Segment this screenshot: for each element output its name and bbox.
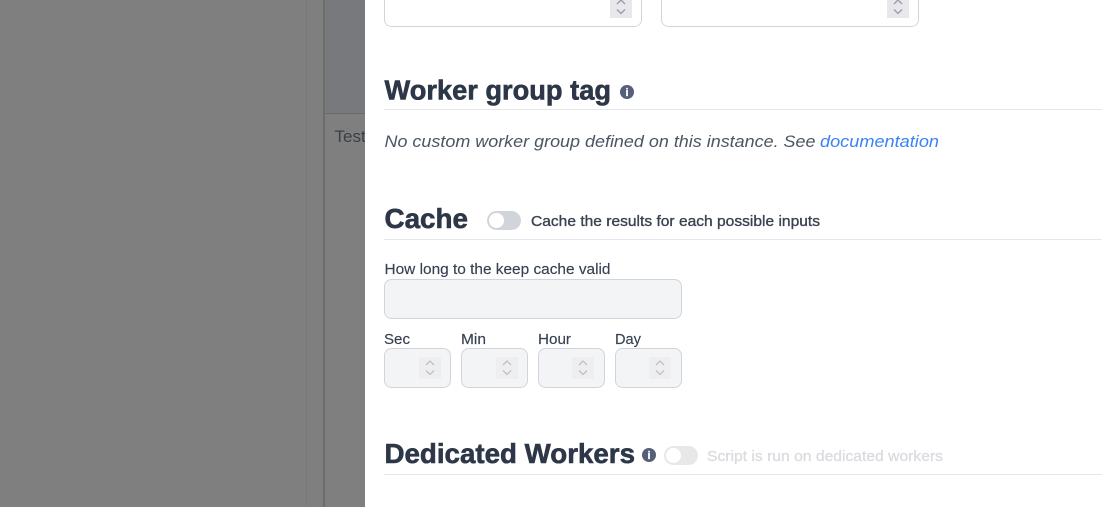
field: hour: Hour — [538, 331, 571, 348]
field: hour — [538, 331, 604, 388]
field: cache duration: How long to the keep cache valid — [384, 261, 610, 278]
icon: info: i — [625, 87, 629, 99]
worker group note: No custom worker group defined on this instance. See — [384, 132, 816, 151]
field: sec — [384, 331, 450, 388]
icon: info — [620, 85, 634, 99]
field: min: Min — [461, 331, 486, 348]
heading: dedicated workers — [384, 438, 943, 469]
dimmed table cell text: Test — [334, 127, 366, 146]
heading: cache — [384, 203, 820, 234]
documentation link: documentation — [820, 132, 939, 151]
heading: cache: Cache — [384, 203, 468, 234]
drawer panel — [365, 0, 1102, 507]
icon: info: i — [647, 450, 651, 462]
field: day: Day — [615, 331, 641, 348]
field: cache duration — [384, 261, 682, 318]
cache toggle label: Cache the results for each possible inputs — [531, 213, 820, 230]
field: sec: Sec — [384, 331, 410, 348]
field: day — [615, 331, 682, 388]
dimmed background page — [0, 0, 366, 507]
number input: left — [384, 0, 642, 26]
number input: right — [662, 0, 918, 26]
heading: dedicated workers: Dedicated Workers — [384, 438, 635, 469]
field: min — [461, 331, 528, 388]
heading: worker group tag: Worker group tag — [384, 74, 611, 106]
toggle: dedicated workers — [664, 446, 698, 465]
toggle: cache — [487, 211, 521, 230]
dedicated workers label: Script is run on dedicated workers — [707, 448, 943, 465]
icon: info — [642, 448, 656, 462]
